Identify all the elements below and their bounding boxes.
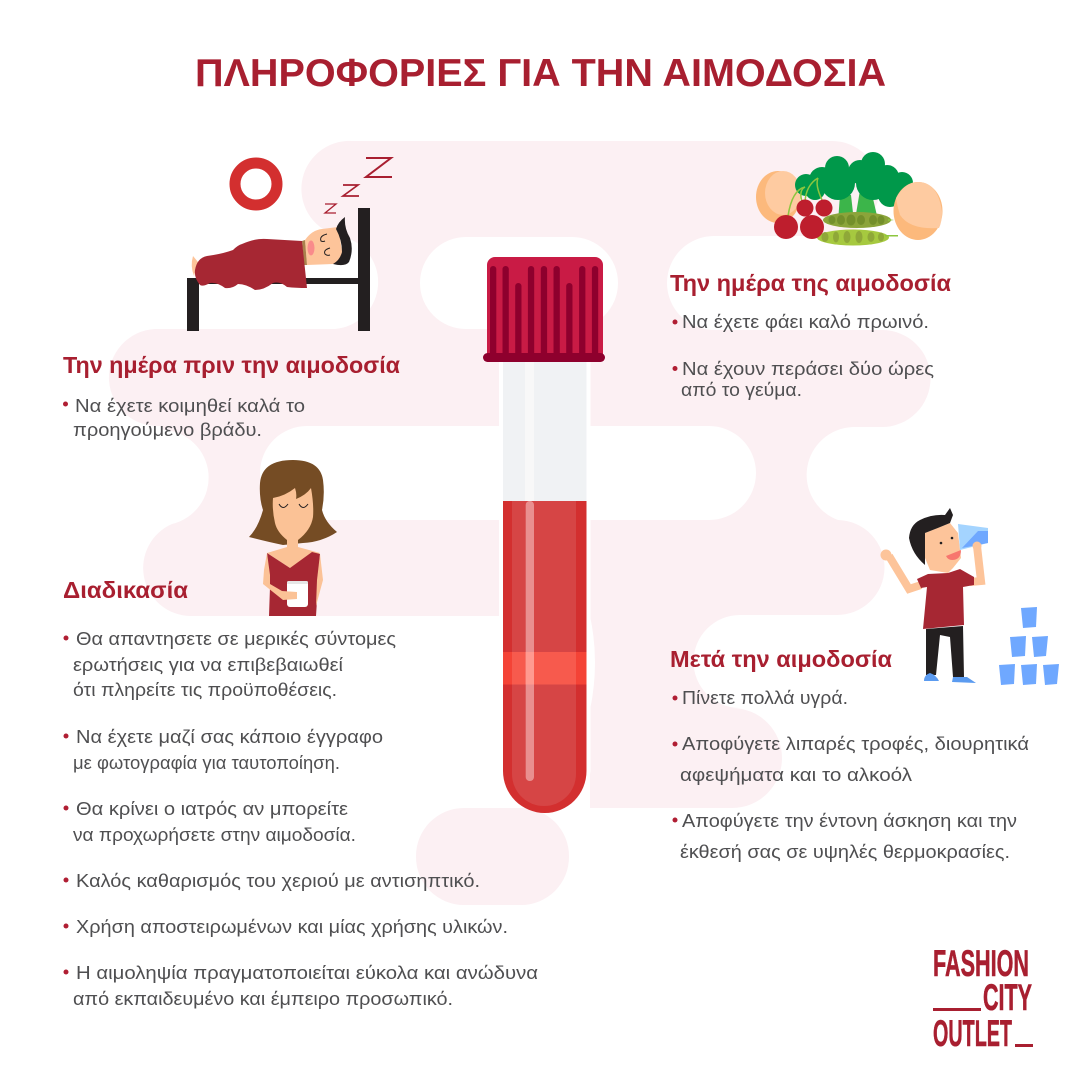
heading: after donation: Μετά την αιμοδοσία bbox=[670, 646, 892, 672]
logo: Fashion City Outlet: CITY bbox=[983, 977, 1032, 1018]
panel: procedure: Να έχετε μαζί σας κάποιο έγγραφο bbox=[76, 727, 383, 747]
panel: the day before: Να έχετε κοιμηθεί καλά το bbox=[75, 396, 305, 416]
panel: procedure: Θα κρίνει ο ιατρός αν μπορείτε bbox=[76, 799, 348, 819]
panel: the donation day bbox=[670, 270, 951, 400]
panel: after donation: αφεψήματα και το αλκοόλ bbox=[680, 765, 912, 785]
panel: the donation day: Να έχουν περάσει δύο ώρες bbox=[682, 359, 934, 379]
panel: after donation bbox=[670, 646, 1029, 862]
heading: donation day: Την ημέρα της αιμοδοσία bbox=[670, 270, 951, 296]
test tube bbox=[483, 257, 605, 813]
icon: stacked cups bbox=[999, 607, 1059, 685]
panel: procedure: Χρήση αποστειρωμένων και μίας χρήσης υλικών. bbox=[76, 917, 508, 937]
logo: Fashion City Outlet: OUTLET bbox=[933, 1013, 1012, 1054]
panel: after donation: Πίνετε πολλά υγρά. bbox=[682, 688, 848, 708]
panel: procedure: ερωτήσεις για να επιβεβαιωθεί bbox=[73, 655, 343, 675]
panel: the day before: προηγούμενο βράδυ. bbox=[73, 420, 262, 440]
logo: Fashion City Outlet bbox=[933, 943, 1033, 1054]
icon: healthy food bbox=[756, 152, 942, 246]
panel: procedure: από εκπαιδευμένο και έμπειρο προσωπικό. bbox=[73, 989, 453, 1009]
panel: the donation day: από το γεύμα. bbox=[681, 380, 802, 400]
icon: sleeping person in bed bbox=[187, 158, 392, 331]
panel: procedure bbox=[63, 577, 538, 1009]
panel: after donation: Αποφύγετε την έντονη άσκηση και την bbox=[682, 811, 1017, 831]
panel: procedure: να προχωρήσετε στην αιμοδοσία. bbox=[73, 825, 356, 845]
panel: procedure: Θα απαντησετε σε μερικές σύντομες bbox=[76, 629, 396, 649]
background blob bbox=[109, 141, 930, 905]
icon: woman with cup bbox=[249, 460, 337, 616]
panel: the donation day: Να έχετε φάει καλό πρωινό. bbox=[682, 312, 929, 332]
panel: procedure: με φωτογραφία για ταυτοποίηση. bbox=[73, 753, 340, 773]
panel: procedure: ότι πληρείτε τις προϋποθέσεις. bbox=[73, 680, 337, 700]
panel: after donation: Αποφύγετε λιπαρές τροφές, διουρητικά bbox=[682, 734, 1029, 754]
panel: procedure: Καλός καθαρισμός του χεριού με αντισηπτικό. bbox=[76, 871, 480, 891]
icon: boy drinking water bbox=[880, 508, 1059, 685]
tube cap bbox=[483, 257, 605, 362]
panel: the day before bbox=[63, 352, 400, 440]
heading: day before: Την ημέρα πριν την αιμοδοσία bbox=[63, 352, 400, 378]
panel: after donation: έκθεσή σας σε υψηλές θερμοκρασίες. bbox=[680, 842, 1010, 862]
title: ΠΛΗΡΟΦΟΡΙΕΣ ΓΙΑ ΤΗΝ ΑΙΜΟΔΟΣΙΑ bbox=[195, 52, 886, 95]
panel: procedure: Η αιμοληψία πραγματοποιείται εύκολα και ανώδυνα bbox=[76, 963, 538, 983]
heading: procedure: Διαδικασία bbox=[63, 577, 188, 603]
